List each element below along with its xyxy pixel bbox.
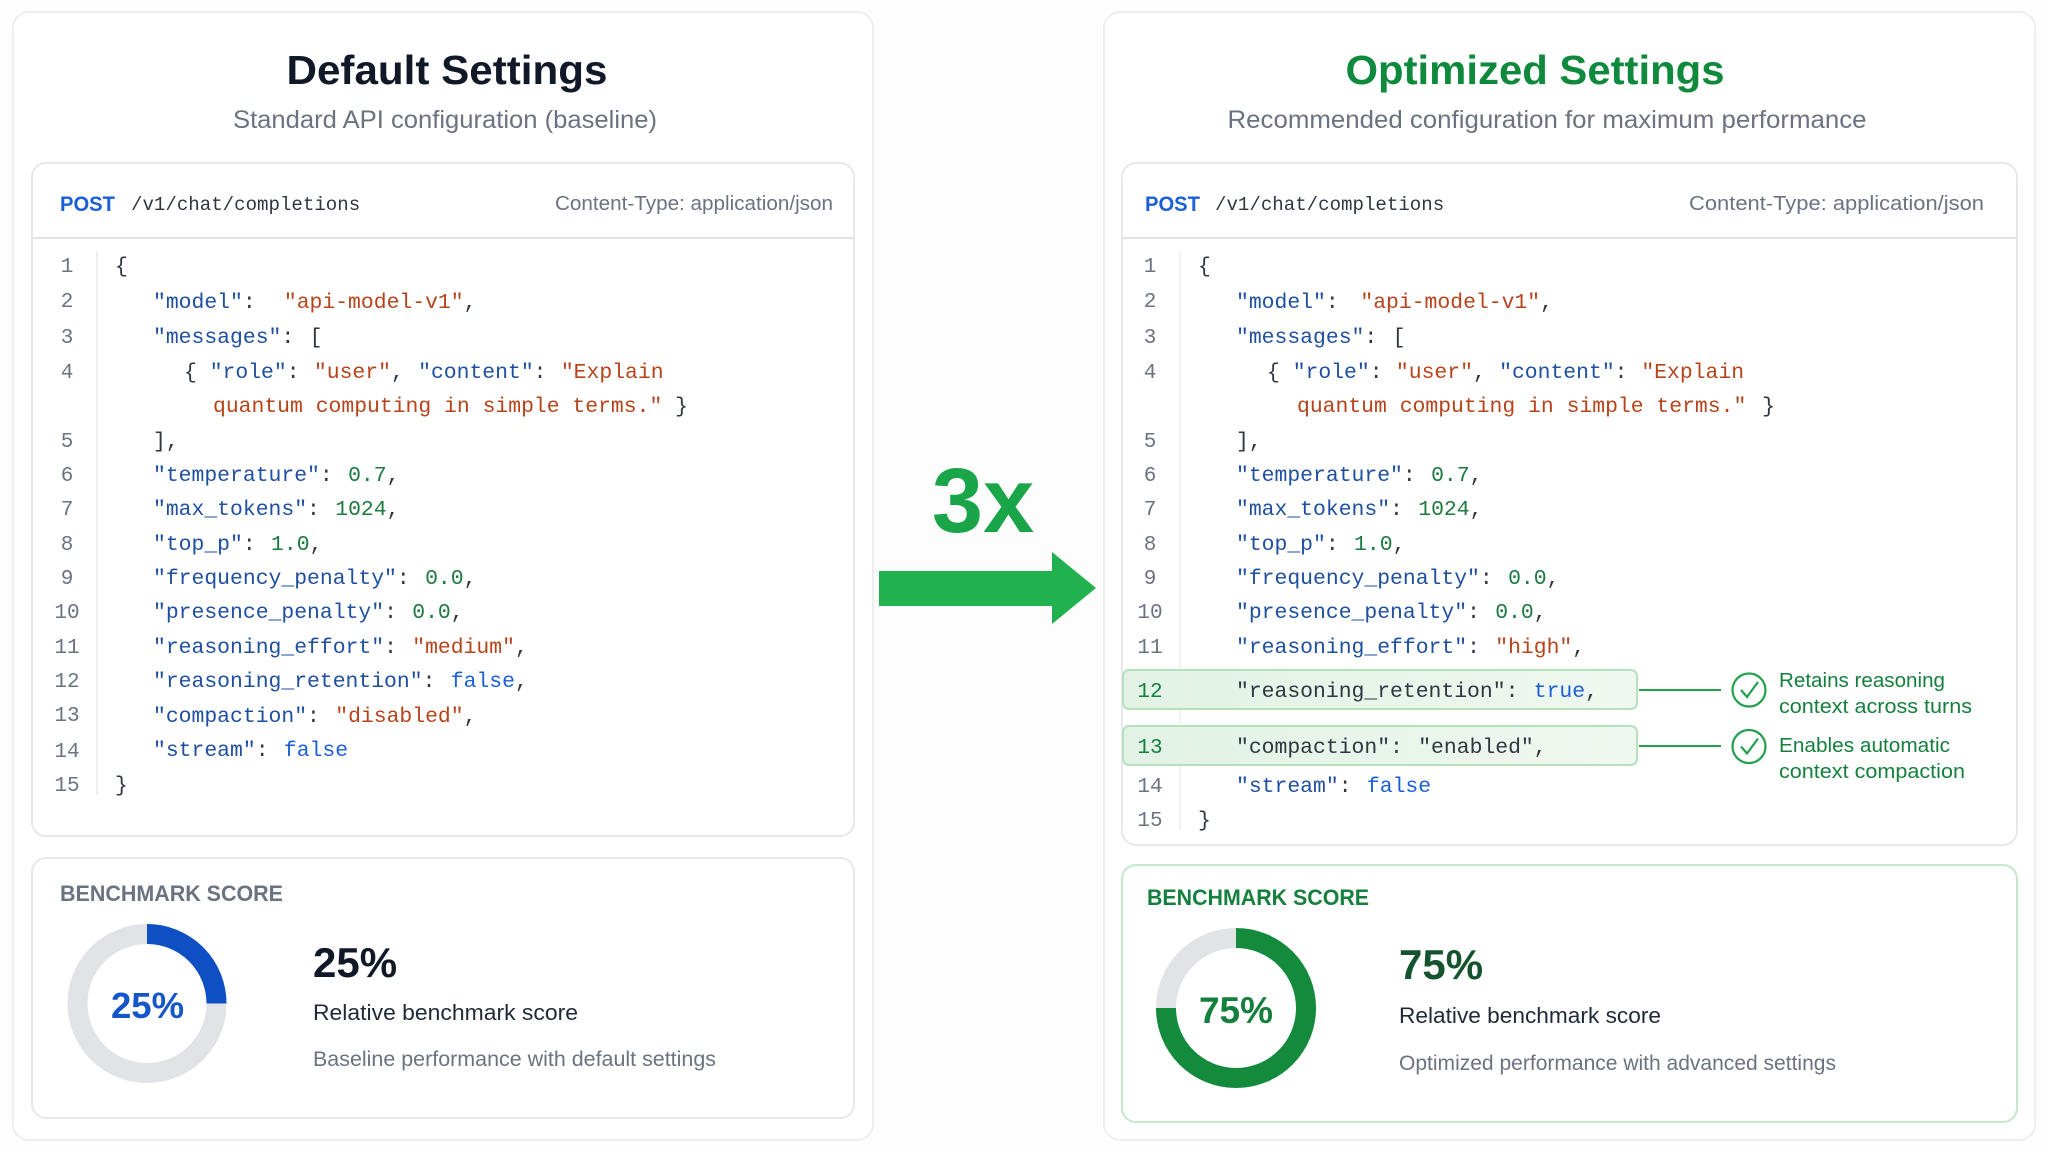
line numbers: optimized: 15 — [1137, 810, 1163, 833]
code block: optimized json: "presence_penalty": 0.0, — [1236, 601, 1547, 625]
request header: optimized: Content-Type: application/json — [1689, 193, 1984, 215]
code block: default json: "stream": false — [153, 739, 348, 763]
code block: default json: } — [115, 774, 128, 798]
code block: optimized json: { — [1198, 255, 1211, 279]
line numbers: optimized: 10 — [1137, 602, 1163, 625]
request header: default: /v1/chat/completions — [131, 194, 360, 216]
callout: reasoning retention — [1639, 670, 1972, 718]
line numbers: default: 4 — [61, 362, 73, 385]
code block: default json — [115, 255, 688, 798]
line numbers: default: 13 — [54, 705, 80, 728]
request header: optimized — [1145, 193, 1984, 216]
code block: optimized json: "temperature": 0.7, — [1236, 464, 1482, 488]
code block: default json: "frequency_penalty": 0.0, — [153, 567, 476, 591]
line numbers: default: 14 — [54, 741, 80, 764]
score details: default — [313, 939, 716, 1071]
line numbers: optimized: 8 — [1144, 534, 1156, 557]
line numbers: optimized: 14 — [1137, 776, 1163, 799]
code block: default json: "compaction": "disabled", — [153, 705, 476, 729]
line numbers: optimized: 1 — [1144, 256, 1156, 279]
benchmark card: default — [32, 858, 854, 1118]
line numbers: default: 9 — [61, 568, 73, 591]
callout: reasoning retention: context across turns — [1779, 696, 1972, 718]
code block: optimized json: "top_p": 1.0, — [1236, 533, 1405, 557]
line numbers: optimized: 2 — [1144, 291, 1156, 314]
benchmark label: optimized: BENCHMARK SCORE — [1147, 885, 1369, 910]
code block: default json: "top_p": 1.0, — [153, 533, 322, 557]
request header: optimized: POST — [1145, 193, 1200, 216]
code card: default request — [32, 163, 854, 836]
code block: default json: { — [115, 255, 128, 279]
line numbers: optimized: 7 — [1144, 499, 1156, 522]
subtitle: optimized: Recommended configuration for maximum performance — [1228, 106, 1866, 134]
title: default settings: Default Settings — [286, 47, 608, 93]
score details: optimized: Relative benchmark score — [1399, 1003, 1661, 1028]
callout: compaction: Enables automatic — [1779, 735, 1950, 757]
request header: default: POST — [60, 193, 115, 216]
line numbers: optimized: 3 — [1144, 327, 1156, 350]
line numbers: optimized: 9 — [1144, 568, 1156, 591]
code block: optimized json: quantum computing in simple terms." } — [1297, 395, 1775, 419]
panel: optimized settings — [1104, 12, 2035, 1140]
code card: optimized request — [1122, 163, 2017, 845]
callout: compaction — [1639, 730, 1965, 783]
request header: optimized: /v1/chat/completions — [1215, 194, 1444, 216]
callout: compaction: context compaction — [1779, 761, 1965, 783]
title: optimized settings: Optimized Settings — [1346, 47, 1724, 93]
line numbers: default — [54, 256, 80, 798]
line numbers: default: 7 — [61, 499, 73, 522]
code block: default json: { "role": "user", "content": "Explain — [184, 361, 664, 385]
callout: reasoning retention: Retains reasoning — [1779, 670, 1945, 692]
line numbers: default: 12 — [54, 671, 80, 694]
line numbers: default: 8 — [61, 534, 73, 557]
subtitle: default: Standard API configuration (baseline) — [233, 106, 657, 134]
code block: optimized json: "stream": false — [1236, 775, 1431, 799]
code block: optimized json: "reasoning_retention": true, — [1236, 680, 1598, 704]
code block: default json: ], — [153, 430, 179, 454]
donut chart: 25 percent: 25% — [111, 985, 184, 1026]
score details: optimized: Optimized performance with advanced settings — [1399, 1052, 1836, 1075]
code block: optimized json: "messages": [ — [1236, 326, 1405, 350]
line numbers: optimized: 11 — [1137, 637, 1163, 660]
line numbers: optimized — [1137, 256, 1163, 833]
code block: default json: "reasoning_effort": "medium", — [153, 636, 528, 660]
code block: optimized json: "model": "api-model-v1", — [1236, 291, 1553, 315]
line numbers: optimized: 12 — [1137, 681, 1163, 704]
line numbers: optimized: 5 — [1144, 431, 1156, 454]
line numbers: default: 5 — [61, 431, 73, 454]
line numbers: optimized: 13 — [1137, 737, 1163, 760]
code block: optimized json: "max_tokens": 1024, — [1236, 498, 1482, 522]
donut chart: 75 percent — [1166, 938, 1306, 1078]
score details: optimized: 75% — [1399, 941, 1483, 988]
multiplier: 3x: 3x — [932, 450, 1034, 552]
code block: default json: "messages": [ — [153, 326, 322, 350]
request header: default: Content-Type: application/json — [555, 193, 833, 215]
code block: optimized json: "reasoning_effort": "high", — [1236, 636, 1585, 660]
benchmark card: optimized — [1122, 865, 2017, 1122]
score details: optimized — [1399, 941, 1836, 1075]
line numbers: default: 2 — [61, 291, 73, 314]
line numbers: default: 11 — [54, 637, 80, 660]
code block: default json: "max_tokens": 1024, — [153, 498, 399, 522]
highlight row: reasoning retention — [1123, 670, 1637, 709]
panel: default settings — [13, 12, 873, 1140]
code block: optimized json: "compaction": "enabled", — [1236, 736, 1547, 760]
code block: default json: "temperature": 0.7, — [153, 464, 399, 488]
score details: default: 25% — [313, 939, 397, 986]
code block: default json: quantum computing in simple terms." } — [213, 395, 688, 419]
score details: default: Relative benchmark score — [313, 1000, 578, 1025]
code block: default json: "model": "api-model-v1", — [153, 291, 476, 315]
arrow: default to optimized — [879, 552, 1096, 624]
line numbers: default: 15 — [54, 775, 80, 798]
score details: default: Baseline performance with default settings — [313, 1048, 716, 1071]
code block: optimized json: } — [1198, 809, 1211, 833]
request header: default — [60, 193, 833, 216]
code block: default json: "presence_penalty": 0.0, — [153, 601, 464, 625]
donut chart: 75 percent: 75% — [1199, 990, 1273, 1031]
line numbers: optimized: 6 — [1144, 465, 1156, 488]
line numbers: default: 6 — [61, 465, 73, 488]
line numbers: default: 3 — [61, 327, 73, 350]
code block: default json: "reasoning_retention": false, — [153, 670, 528, 694]
donut chart: 25 percent — [78, 934, 216, 1073]
code block: optimized json: { "role": "user", "content": "Explain — [1267, 361, 1744, 385]
code block: optimized json: "frequency_penalty": 0.0, — [1236, 567, 1559, 591]
highlight row: compaction — [1123, 726, 1637, 765]
code block: optimized json — [1198, 255, 1775, 833]
line numbers: default: 10 — [54, 602, 80, 625]
line numbers: default: 1 — [61, 256, 73, 279]
benchmark label: default: BENCHMARK SCORE — [60, 881, 283, 906]
line numbers: optimized: 4 — [1144, 362, 1156, 385]
code block: optimized json: ], — [1236, 430, 1262, 454]
